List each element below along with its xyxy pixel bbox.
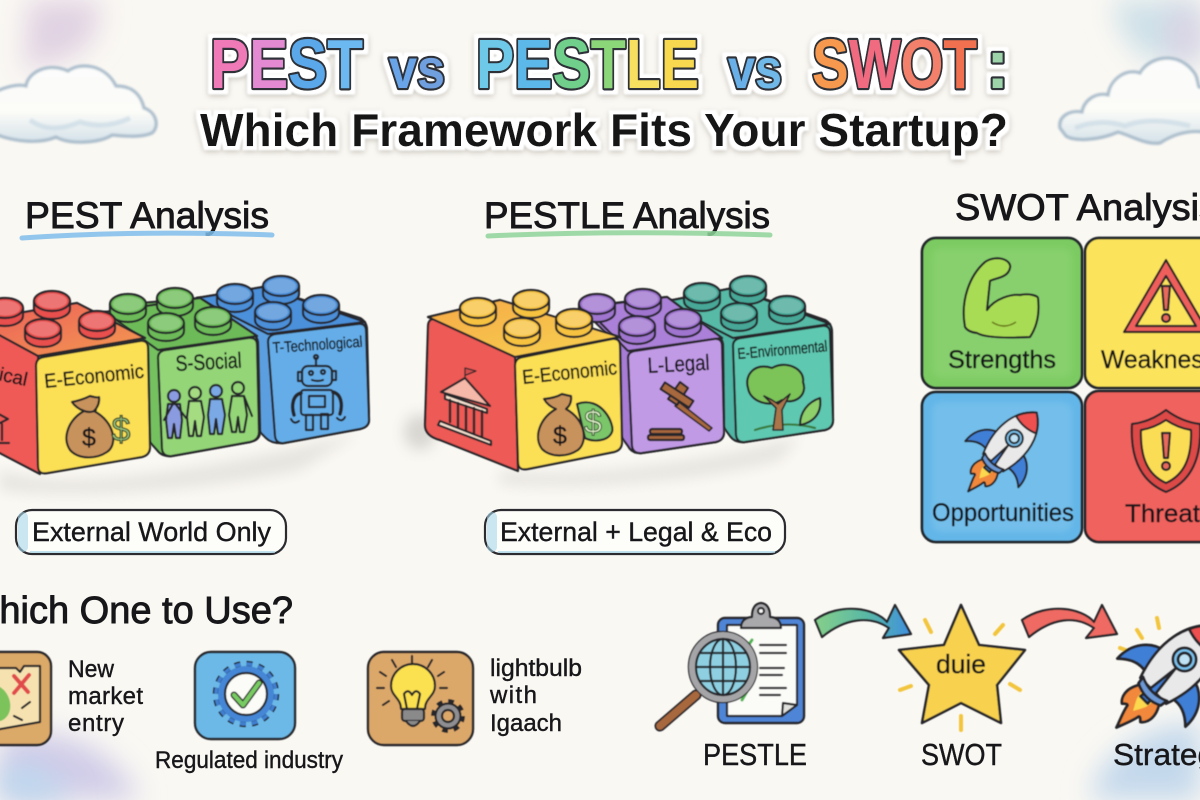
label: E-Environmental: E-Environmental [737,338,828,363]
brick: E environmental [663,276,833,442]
panel: PEST analysis [0,195,369,554]
icon: tree and leaf [747,365,820,430]
icon: clipboard with magnifier [660,603,804,726]
icon: money bag: $ [584,404,602,440]
icon: robot [291,355,345,430]
icon: strategy rocket [1082,592,1200,762]
pill: External + Legal and Eco [485,510,785,554]
orange top face [428,300,620,357]
icon: regulation badge tile [195,652,295,739]
icon: government building [438,368,491,445]
title line one: vs [728,37,782,100]
PESTLE underline [488,233,770,236]
brick shadow [500,436,800,486]
icon: money bag: $ [553,422,567,450]
pill: External + Legal and Eco: External + Legal & Eco [500,517,772,547]
panel: PESTLE analysis [404,195,833,554]
label: lightbulb with Igaach: lightbulb [490,655,582,682]
title line one: : [986,25,1009,103]
brick: L legal [579,289,724,453]
label: duie: duie [936,649,986,679]
title [200,25,1009,156]
icon: lightbulb tile [368,652,473,745]
title line one [210,25,1009,103]
label: new market entry: entry [68,710,124,737]
red side face [425,319,518,471]
title line one: PEST [210,25,363,103]
cloud: right [1060,58,1200,143]
label: lightbulb with Igaach: with [489,682,537,709]
brick: S social [100,288,260,456]
label: SWOT: SWOT [921,737,1002,772]
icon: treasure map tile [0,652,51,745]
icon: rocket [942,389,1063,515]
pill: External World Only: External World Only [32,517,271,547]
panel: workflow [660,592,1200,772]
arrow: SWOT to strategy [1022,605,1117,638]
icon: money bag [66,396,131,457]
icon: bank fragment [0,413,9,443]
label: T-Technological: T-Technological [272,334,363,357]
title line one: PESTLE [476,25,699,103]
icon: flexed arm [964,258,1039,338]
label: PESTLE: PESTLE [703,737,807,772]
label: E-Economic: E-Economic [521,357,618,389]
icon: shield [1132,410,1200,492]
brick shadow [0,432,360,493]
title line two: Which Framework Fits Your Startup? [200,104,1008,156]
panel: SWOT analysis [922,187,1200,542]
label: lightbulb with Igaach: Igaach [490,710,562,737]
label: S-Social: S-Social [175,348,242,376]
label: regulated industry: Regulated industry [155,747,343,774]
quadrant: opportunities [922,389,1082,542]
title line one: vs [389,37,445,100]
label: L-Legal: L-Legal [647,350,710,378]
title line one: SWOT [812,25,977,103]
icon: money bag: $ [112,411,131,449]
red top face [0,303,145,356]
PESTLE heading: PESTLE Analysis [484,195,770,236]
pill: External World Only [16,510,286,554]
icon: warning triangle [1124,260,1200,332]
label: E-Economic: E-Economic [43,361,145,393]
quadrant: strengths [922,238,1082,388]
brick: P political and E economic [425,290,622,471]
cloud: left [0,66,156,142]
panel: which one to use [0,590,582,774]
icon: money bag [538,394,612,456]
yellow front face [515,339,622,469]
icon: gavel [648,382,712,440]
label: Strengths: Strengths [948,346,1056,374]
brick: P political and E economic [0,291,150,474]
PEST heading: PEST Analysis [25,195,269,236]
arrow: PESTLE to SWOT [815,605,911,638]
brick: T technological [197,276,369,443]
quadrant: weakness [1085,238,1200,388]
icon: star [899,605,1025,730]
icon: people holding hands [164,382,252,438]
label: Opportunities: Opportunities [932,499,1074,527]
icon: money bag: $ [82,424,96,452]
quadrant: threats [1085,391,1200,542]
yellow front face [36,341,150,473]
label: new market entry: New [68,656,115,683]
PEST underline [22,233,272,238]
label: new market entry: market [68,683,143,710]
red side face [0,322,40,474]
